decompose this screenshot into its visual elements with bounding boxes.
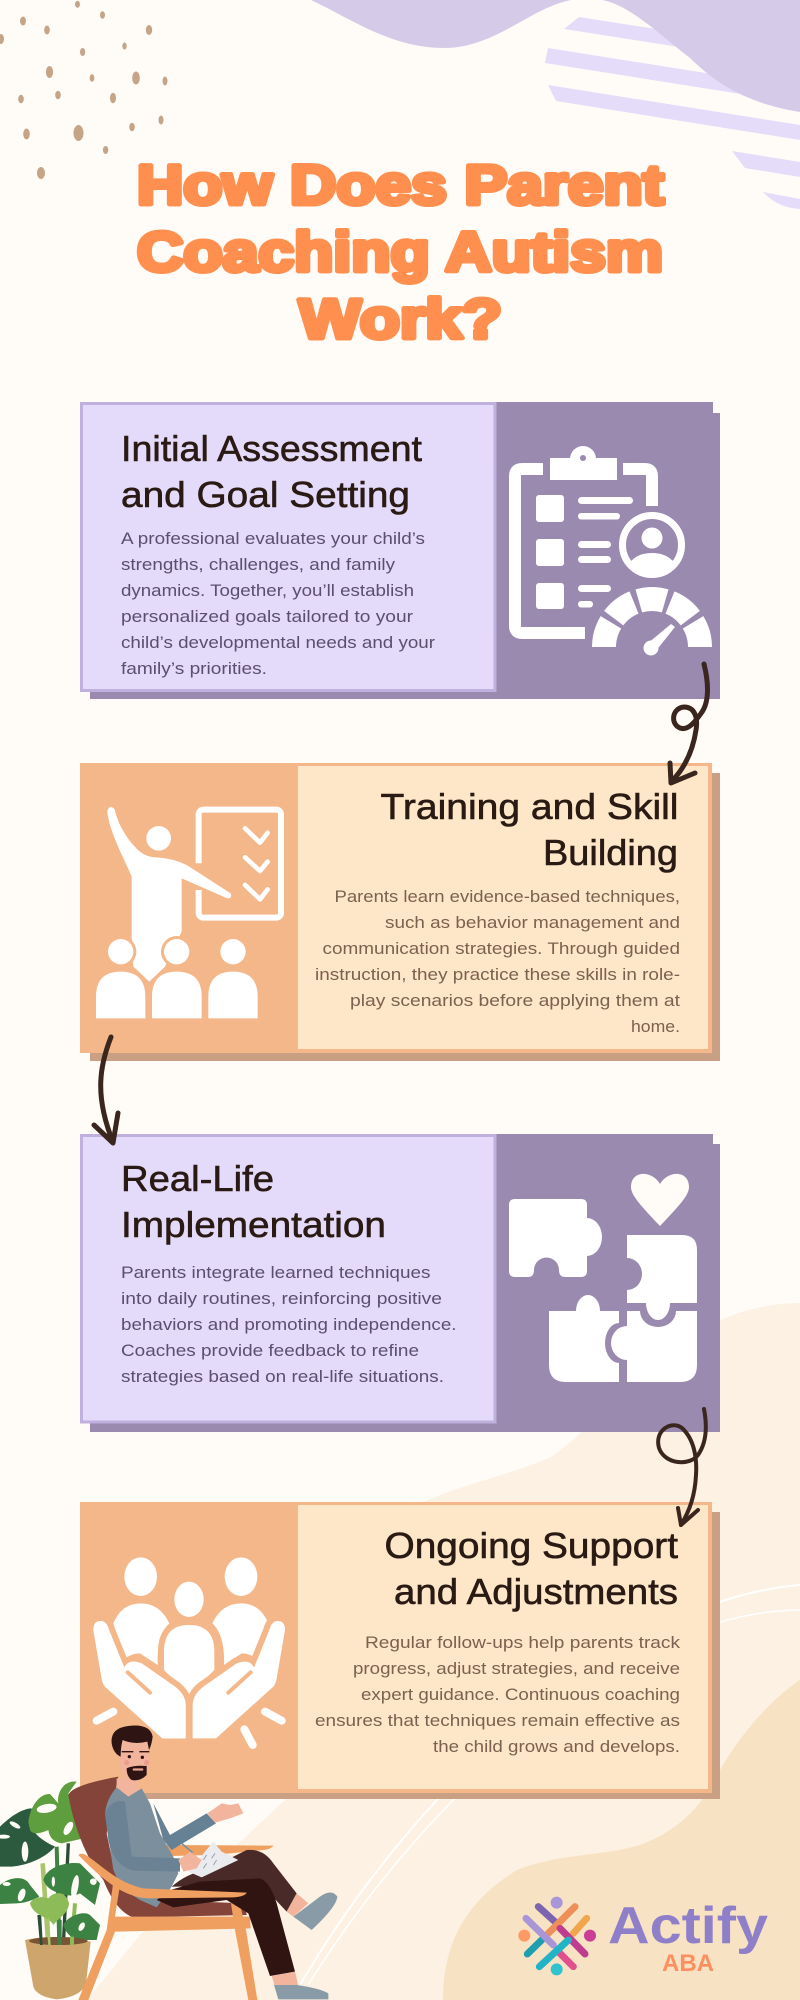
text block: initial assessment: strengths, challenges, and family	[121, 556, 396, 574]
text block: ongoing support and adjustments	[315, 1634, 681, 1756]
illustration: potted plant	[0, 1782, 100, 1999]
text block: initial assessment	[121, 530, 436, 678]
logo: Actify ABA: Actify	[608, 1897, 768, 1955]
heading: ongoing support and adjustments: and Adjustments	[394, 1571, 678, 1612]
heading: ongoing support and adjustments	[384, 1525, 678, 1612]
heading: real-life implementation: Implementation	[121, 1204, 386, 1245]
logo: Actify ABA: ABA	[662, 1950, 714, 1977]
text block: ongoing support and adjustments: ensures that techniques remain effective as	[315, 1712, 680, 1730]
heading: training and skill building	[380, 786, 678, 873]
text block: training and skill building	[315, 888, 680, 1036]
text block: ongoing support and adjustments: the child grows and develops.	[433, 1738, 680, 1756]
arrow: step 3 to step 4	[658, 1409, 706, 1525]
heading: real-life implementation	[121, 1158, 386, 1245]
text block: training and skill building: communication strategies. Through guided	[322, 940, 680, 958]
heading: training and skill building: Training and Skill	[380, 786, 678, 827]
logo: Actify ABA	[518, 1897, 768, 1977]
arrow: step 1 to step 2	[670, 664, 708, 783]
text block: initial assessment: dynamics. Together, you’ll establish	[121, 582, 414, 600]
heading: initial assessment: Initial Assessment	[121, 428, 422, 469]
illustration: seated coach with notebook	[68, 1726, 337, 2000]
text block: real-life implementation: into daily routines, reinforcing positive	[121, 1290, 442, 1308]
text block: initial assessment: child’s developmental needs and your	[121, 634, 436, 652]
text block: training and skill building: home.	[631, 1018, 680, 1036]
heading: ongoing support and adjustments: Ongoing Support	[384, 1525, 678, 1566]
text block: initial assessment: personalized goals tailored to your	[121, 608, 414, 626]
panel: real-life implementation	[82, 1134, 720, 1432]
panel: initial assessment	[82, 402, 720, 699]
chair	[68, 1777, 273, 2000]
text block: training and skill building: Parents learn evidence-based techniques,	[334, 888, 680, 906]
text block: real-life implementation: strategies based on real-life situations.	[121, 1368, 444, 1386]
icon: clipboard with profile and gauge	[515, 446, 700, 656]
title: Coaching Autism	[137, 220, 663, 283]
heading: training and skill building: Building	[543, 832, 678, 873]
background: top decorative shapes	[311, 0, 800, 209]
title	[137, 153, 664, 350]
text block: real-life implementation: Coaches provide feedback to refine	[121, 1342, 419, 1360]
text block: training and skill building: play scenarios before applying them at	[350, 992, 680, 1010]
text block: real-life implementation: Parents integrate learned techniques	[121, 1264, 430, 1282]
panel: ongoing support and adjustments	[80, 1502, 720, 1799]
text block: ongoing support and adjustments: expert guidance. Continuous coaching	[361, 1686, 680, 1704]
background: bottom decorative blobs	[87, 1303, 800, 2000]
heading: real-life implementation: Real-Life	[121, 1158, 274, 1199]
text block: ongoing support and adjustments: Regular follow-ups help parents track	[365, 1634, 681, 1652]
coach figure	[105, 1726, 337, 1999]
icon: puzzle pieces and heart	[509, 1174, 697, 1382]
icon: hands holding family	[93, 1557, 285, 1745]
text block: initial assessment: family’s priorities.	[121, 660, 267, 678]
heading: initial assessment	[121, 428, 422, 515]
text block: real-life implementation	[121, 1264, 456, 1386]
icon: teacher at whiteboard with audience	[96, 807, 281, 1018]
background: scattered dots	[0, 1, 168, 179]
arrow: step 2 to step 3	[94, 1037, 118, 1143]
text block: training and skill building: such as behavior management and	[385, 914, 680, 932]
text block: ongoing support and adjustments: progress, adjust strategies, and receive	[353, 1660, 680, 1678]
title: Work?	[299, 287, 502, 350]
text block: training and skill building: instruction, they practice these skills in role-	[315, 966, 680, 984]
panel: training and skill building	[80, 763, 720, 1061]
heading: initial assessment: and Goal Setting	[121, 474, 410, 515]
title: How Does Parent	[137, 153, 664, 216]
chair armrest	[78, 1854, 247, 1898]
text block: initial assessment: A professional evaluates your child’s	[121, 530, 425, 548]
text block: real-life implementation: behaviors and promoting independence.	[121, 1316, 456, 1334]
